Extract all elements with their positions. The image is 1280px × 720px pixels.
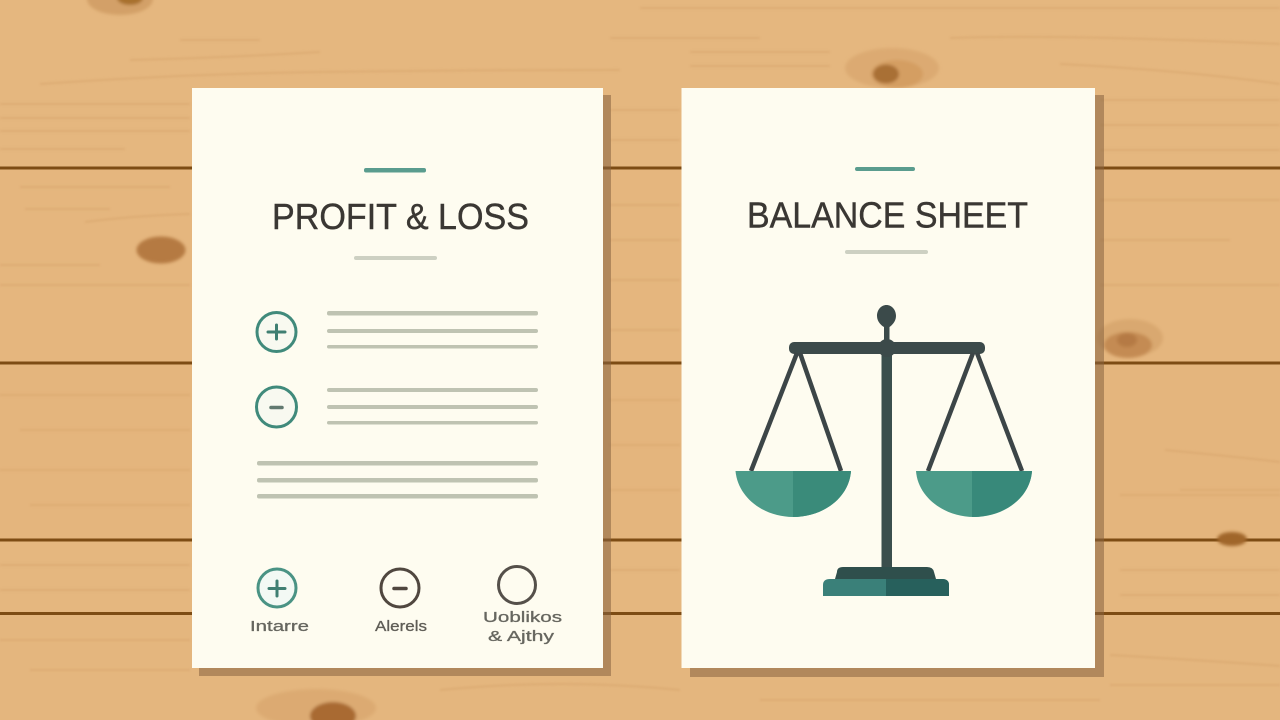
legend item: minus [375, 569, 427, 635]
teal accent bar [855, 167, 915, 171]
legend item: empty circle [483, 566, 562, 645]
heading: balance sheet: BALANCE SHEET [747, 194, 1028, 236]
panel: profit & loss [192, 88, 603, 668]
label: Uoblikos [483, 609, 562, 626]
paper sheet: profit & loss [192, 88, 603, 668]
right hanger strings [928, 353, 1022, 471]
summary lines [257, 461, 538, 498]
heading underline [845, 250, 928, 254]
heading: profit & loss: PROFIT & LOSS [272, 196, 529, 237]
central post [882, 350, 892, 572]
panel: balance sheet [682, 88, 1095, 668]
icon: minus [256, 387, 296, 427]
paper sheet: balance sheet [682, 88, 1095, 668]
left hanger strings [751, 353, 841, 471]
plus icon with text lines [257, 311, 538, 352]
left pan [736, 471, 851, 517]
placeholder text lines [327, 388, 538, 424]
base [823, 567, 949, 596]
label: Intarre [250, 618, 309, 635]
teal accent bar [364, 168, 426, 172]
icon: plus circle [258, 569, 296, 607]
icon: empty circle [498, 566, 536, 604]
beam [789, 339, 985, 357]
right pan [916, 471, 1032, 517]
label second line: & Ajthy [488, 628, 555, 645]
icon: plus [257, 312, 296, 352]
label: Alerels [375, 618, 427, 635]
placeholder text lines [327, 311, 538, 348]
icon: minus circle [381, 569, 419, 607]
heading underline [354, 256, 437, 260]
panel shadows [199, 95, 1104, 677]
icon: balance scale [736, 305, 1032, 596]
legend item: plus [250, 569, 309, 635]
minus icon with text lines [256, 387, 538, 427]
finial [877, 305, 896, 342]
